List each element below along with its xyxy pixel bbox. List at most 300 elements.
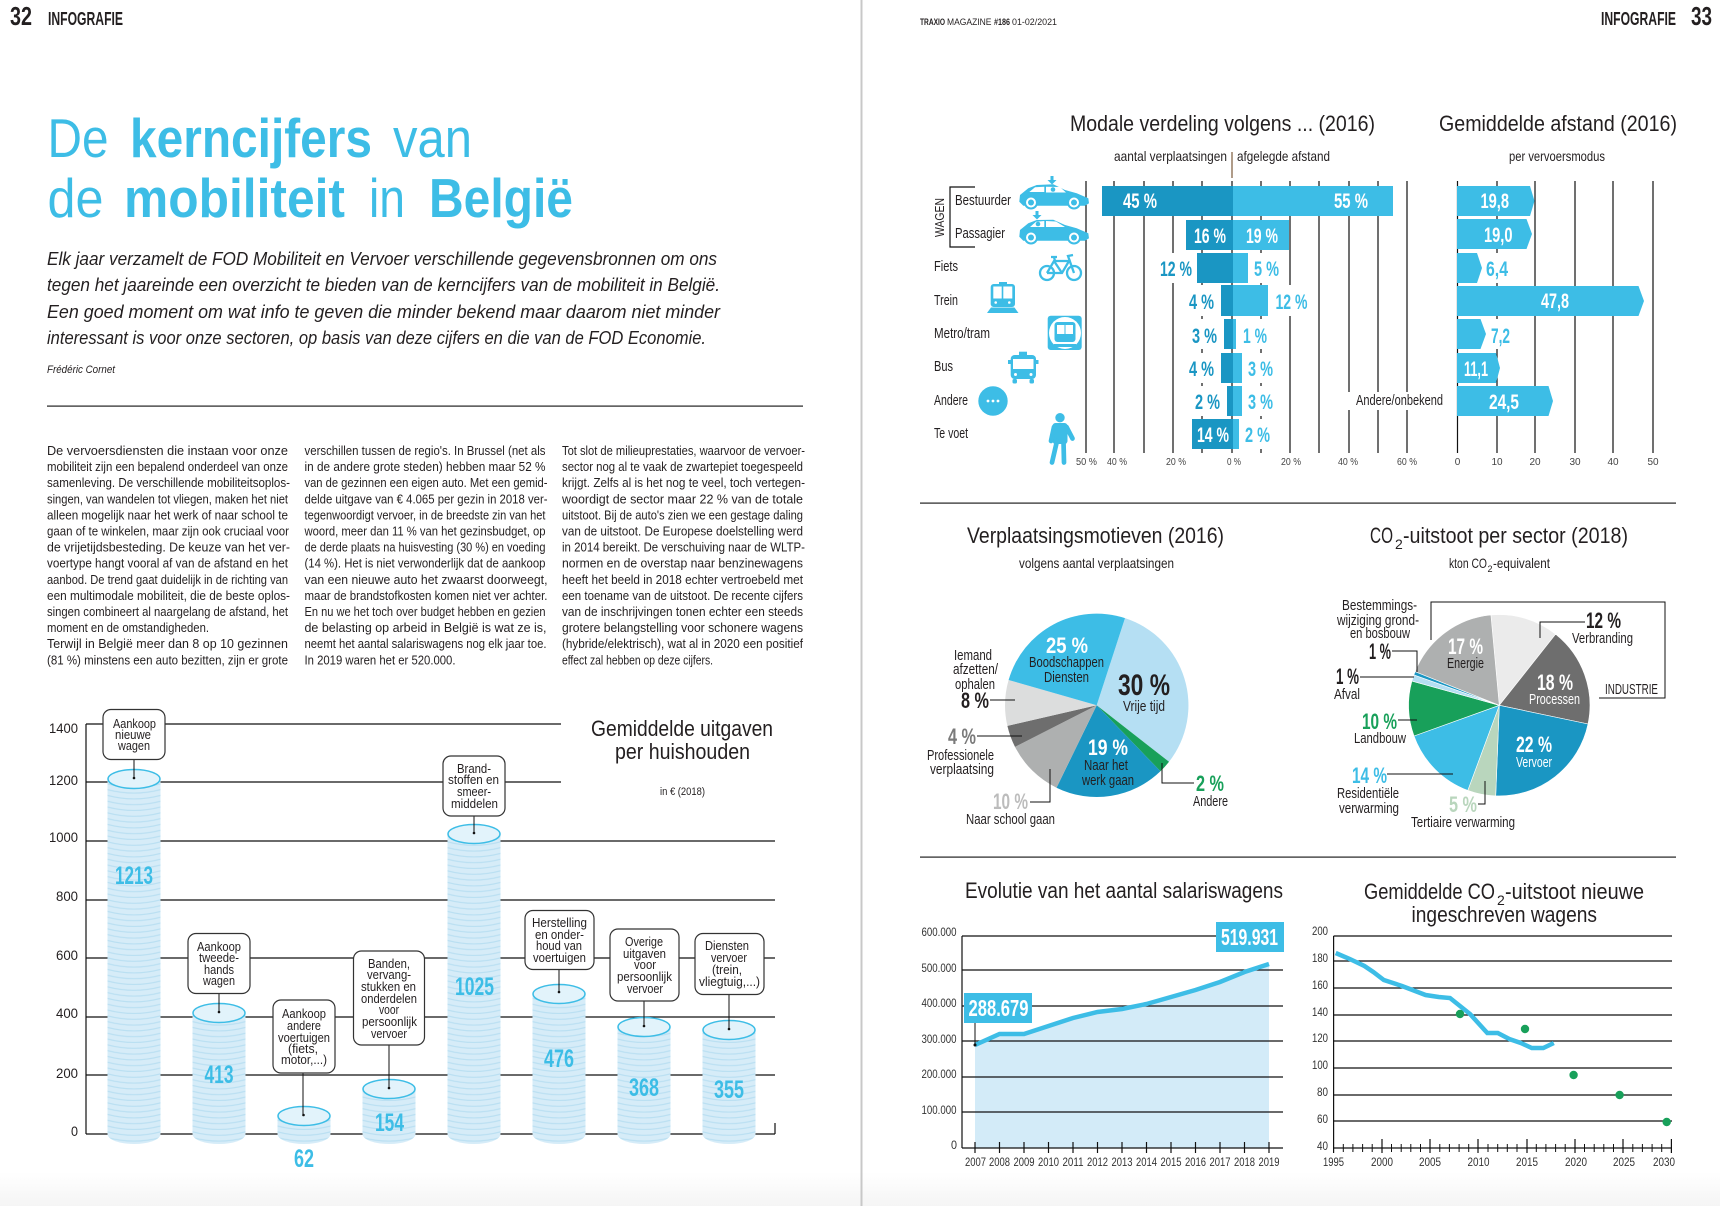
- right page header: 01-02/2021: [1012, 17, 1057, 28]
- slice labels: 4 %: [948, 724, 976, 749]
- mode labels: Fiets: [934, 259, 958, 275]
- callout: herstelling en onderhoud: Herstelling: [532, 916, 587, 930]
- values on stacks: 368: [629, 1074, 659, 1102]
- axis labels: 50: [1647, 457, 1659, 468]
- callout: brandstoffen en smeermiddelen: stoffen en: [448, 773, 499, 787]
- bar percentages: 3 %: [1248, 391, 1273, 414]
- slice labels: 10 %: [1362, 709, 1397, 734]
- callout: banden, vervangstukken: Banden,: [368, 957, 410, 971]
- bar percentages: 1 %: [1243, 325, 1267, 348]
- body text column 2: in de andere grote steden) hebben maar 52 %: [304, 459, 546, 474]
- x labels: 2007: [965, 1155, 986, 1169]
- axis labels: [1076, 457, 1417, 468]
- body text column 2: woord, meer dan 11 % van het gezinsbudget, op: [304, 524, 546, 538]
- heading: gemiddelde afstand: Gemiddelde afstand (2016): [1439, 111, 1677, 136]
- callout: diensten vervoer: [695, 934, 764, 1030]
- slice labels: 14 %: [1352, 763, 1387, 788]
- right page header: [920, 1, 1712, 31]
- bar percentages: 12 %: [1160, 258, 1192, 281]
- x labels: 2018: [1234, 1155, 1255, 1169]
- left page header: [10, 1, 123, 31]
- heading: 2: [1497, 892, 1505, 908]
- x labels: [965, 1155, 1280, 1169]
- heading: -uitstoot nieuwe: [1505, 879, 1644, 904]
- callout: overige uitgaven: voor: [634, 958, 656, 972]
- bar percentages: 3 %: [1248, 358, 1273, 381]
- body text column 1: (81 %) minstens een auto bezitten, zijn er grote: [47, 652, 288, 667]
- body text column 2: de derde plaats na huisvesting (30 %) en voeding: [304, 540, 546, 555]
- y labels: 200: [1312, 924, 1328, 938]
- coin stack: banden: [362, 1080, 416, 1144]
- values on stacks: 476: [544, 1045, 574, 1073]
- distance values: 19,0: [1484, 224, 1512, 247]
- body text column 3: sector nog al te vaak de zwartepiet toegespeeld: [562, 459, 803, 474]
- industry bracket: [1431, 602, 1665, 698]
- callout: 2007 value: [964, 993, 1032, 1046]
- subheading: per vervoersmodus: [1509, 148, 1605, 164]
- values on stacks: [115, 862, 744, 1173]
- y axis and grid lines: [86, 724, 775, 1134]
- left page header: 32: [10, 1, 32, 31]
- callout: banden, vervangstukken: stukken en: [361, 980, 416, 994]
- slice labels: ophalen: [955, 677, 995, 693]
- heading: -uitstoot per sector (2018): [1403, 523, 1628, 548]
- x labels: 2019: [1258, 1155, 1280, 1169]
- y labels: 140: [1312, 1005, 1328, 1019]
- grid and axes: [1334, 936, 1672, 1153]
- title: mobiliteit: [124, 167, 345, 229]
- y labels: 80: [1317, 1085, 1328, 1099]
- coin stack: aankoop nieuwe wagen: [108, 770, 160, 1144]
- callout: 2019 value: 519.931: [1221, 924, 1278, 950]
- wagen bracket: [933, 187, 975, 247]
- slice labels: Vervoer: [1516, 755, 1552, 771]
- pie slices: [1005, 614, 1188, 797]
- heading: CO: [1370, 523, 1393, 548]
- callout: overige uitgaven: uitgaven: [623, 947, 666, 961]
- x labels: 2012: [1087, 1155, 1108, 1169]
- body text column 3: van de inschrijvingen tonen echter een steeds: [562, 604, 803, 619]
- callout: overige uitgaven: [610, 929, 679, 1027]
- y labels: 100.000: [922, 1103, 957, 1117]
- bar percentages: 4 %: [1189, 358, 1214, 381]
- body text column 1: voertype hangt vooral af van de afstand en het: [47, 556, 288, 571]
- callout: aankoop tweedehands wagen: Aankoop: [197, 940, 241, 954]
- bar percentages: 16 %: [1194, 225, 1226, 248]
- body text column 3: Tot slot de milieuprestaties, waarvoor de vervoer-: [562, 443, 805, 458]
- callout: aankoop tweedehands wagen: wagen: [202, 974, 235, 988]
- y labels: [1312, 924, 1328, 1153]
- body text column 3: van de uitstoot. De Europese doelstelling werd: [562, 524, 803, 538]
- callout: aankoop andere voertuigen: andere: [287, 1019, 321, 1033]
- axis labels: 30: [1569, 457, 1581, 468]
- callout: banden, vervangstukken: onderdelen: [361, 992, 417, 1006]
- icon: metro: [1048, 316, 1082, 350]
- y labels: 120: [1312, 1031, 1328, 1045]
- pie slices: [1409, 615, 1590, 796]
- chart heading: Gemiddelde uitgaven: [591, 716, 773, 741]
- intro text: interessant is voor onze sectoren, op basis van deze cijfers en die van de FOD Economie.: [47, 328, 706, 348]
- slice labels: 17 %: [1448, 634, 1483, 659]
- axis labels: 20: [1529, 457, 1541, 468]
- body text column 3: woordigt de sector maar 22 % van de totale: [561, 491, 803, 506]
- mode labels: Te voet: [934, 426, 968, 442]
- slice labels: Landbouw: [1354, 731, 1406, 747]
- slice labels: verplaatsing: [930, 762, 994, 778]
- axis labels: 60 %: [1397, 457, 1417, 468]
- callout: 2007 value: 288.679: [968, 995, 1028, 1021]
- coin stack: overige uitgaven: [618, 1018, 670, 1144]
- CO2 trend line: [1336, 953, 1554, 1048]
- x labels: 2014: [1136, 1155, 1157, 1169]
- y axis labels: 0: [71, 1123, 78, 1139]
- y labels: 100: [1312, 1058, 1328, 1072]
- title: [48, 107, 573, 229]
- chart: evolutie salariswagens: [922, 878, 1284, 1169]
- axis labels: 20 %: [1281, 457, 1301, 468]
- coin stack: tweedehands wagen: [192, 1004, 246, 1144]
- callout: aankoop andere voertuigen: [273, 1000, 335, 1116]
- chart: gemiddelde afstand: [1345, 111, 1677, 468]
- y labels: 40: [1317, 1139, 1328, 1153]
- grid: [1086, 181, 1407, 453]
- x labels: 2009: [1014, 1155, 1035, 1169]
- body text column 3: (hybride/elektrisch), wat al in 2020 een positief: [562, 636, 803, 651]
- heading: [1364, 879, 1644, 927]
- bar percentages: 19 %: [1246, 225, 1278, 248]
- trend line: [975, 964, 1269, 1045]
- y labels: 0: [951, 1138, 957, 1152]
- callout: banden, vervangstukken: persoonlijk: [362, 1015, 418, 1029]
- subheading: kton CO: [1449, 555, 1487, 571]
- slice labels: Bestemmings-: [1342, 598, 1417, 614]
- slice labels: Tertiaire verwarming: [1411, 815, 1515, 831]
- callout: aankoop andere voertuigen: motor,...): [281, 1053, 327, 1067]
- slice labels: 8 %: [961, 688, 989, 713]
- body text column 3: grotere belangstelling voor schonere wagens: [562, 620, 803, 635]
- callout: overige uitgaven: vervoer: [627, 982, 663, 996]
- callout: brandstoffen en smeermiddelen: middelen: [451, 797, 498, 811]
- bar percentages: 2 %: [1245, 424, 1270, 447]
- bar percentages: 3 %: [1192, 325, 1217, 348]
- y axis labels: 1000: [49, 829, 78, 845]
- axis labels: 40: [1607, 457, 1619, 468]
- callout: diensten vervoer: vliegtuig,...): [699, 975, 760, 989]
- subheadings: afgelegde afstand: [1237, 148, 1330, 164]
- body text column 2: van een nieuwe auto het zwaarst doorweegt,: [304, 572, 548, 587]
- mode labels: Trein: [934, 293, 958, 309]
- callout: herstelling en onderhoud: houd van: [536, 939, 582, 953]
- callout: herstelling en onderhoud: voertuigen: [533, 951, 586, 965]
- slice labels: wijziging grond-: [1336, 613, 1419, 629]
- subheading: -equivalent: [1493, 555, 1550, 571]
- x labels: 2010: [1468, 1155, 1490, 1169]
- slice labels: Energie: [1447, 656, 1484, 672]
- bar percentages: 55 %: [1334, 190, 1368, 213]
- arrow bars: [1457, 186, 1644, 416]
- y labels: 400.000: [922, 996, 957, 1010]
- heading: Evolutie van het aantal salariswagens: [965, 878, 1283, 903]
- axis labels: 0: [1455, 457, 1461, 468]
- axis labels: 50 %: [1076, 457, 1097, 468]
- body text column 2: van de gezinnen een eigen auto. Met een gemid-: [304, 475, 548, 490]
- y labels: 60: [1317, 1112, 1328, 1126]
- slice labels: [1334, 598, 1658, 831]
- x labels: 2008: [989, 1155, 1010, 1169]
- x labels: 2005: [1419, 1155, 1441, 1169]
- callout: brandstoffen en smeermiddelen: Brand-: [457, 762, 491, 776]
- slice labels: Boodschappen: [1029, 655, 1104, 671]
- axis labels: [1455, 457, 1659, 468]
- body text column 2: de belasting op arbeid in België is wat ze is,: [304, 620, 546, 635]
- leader lines: [977, 700, 1194, 802]
- callout: banden, vervangstukken: vervoer: [371, 1027, 407, 1041]
- y labels: 500.000: [922, 961, 957, 975]
- bar percentages: 4 %: [1189, 291, 1214, 314]
- values on stacks: 154: [375, 1109, 404, 1137]
- title: de: [48, 167, 104, 229]
- slice labels: Professionele: [927, 748, 994, 764]
- slice labels: Processen: [1529, 692, 1580, 708]
- label backings: [1484, 253, 1512, 349]
- x labels: 2011: [1062, 1155, 1084, 1169]
- coin stack: brandstoffen: [448, 824, 500, 1144]
- bar percentages: 14 %: [1197, 424, 1229, 447]
- slice labels: 19 %: [1088, 735, 1128, 760]
- callout: aankoop andere voertuigen: Aankoop: [282, 1007, 326, 1021]
- body text column 2: (14 %). Het is niet verwonderlijk dat de aankoop: [304, 556, 546, 571]
- heading: Verplaatsingsmotieven (2016): [967, 523, 1224, 548]
- slice labels: verwarming: [1339, 801, 1399, 817]
- body text column 2: tegenwoordigt vervoer, in de breedste zin van het: [304, 507, 546, 522]
- other label: [1345, 392, 1447, 410]
- distance values: 24,5: [1489, 391, 1519, 414]
- body text column 2: [304, 443, 548, 667]
- slice labels: 5 %: [1449, 792, 1477, 817]
- x labels: 2025: [1613, 1155, 1635, 1169]
- x labels: [1323, 1155, 1675, 1169]
- callout: banden, vervangstukken: voor: [379, 1003, 399, 1017]
- body text column 1: alleen mogelijk naar het werk of naar school te: [47, 507, 288, 522]
- subheadings: [1114, 148, 1330, 178]
- callout: aankoop nieuwe wagen: [103, 710, 165, 779]
- x labels: 2010: [1038, 1155, 1059, 1169]
- y labels: [922, 925, 957, 1152]
- callout: aankoop tweedehands wagen: tweede-: [199, 951, 239, 965]
- y labels: 160: [1312, 978, 1328, 992]
- author credit: Frédéric Cornet: [47, 364, 116, 376]
- callout: aankoop nieuwe wagen: nieuwe: [115, 728, 151, 742]
- y axis labels: [49, 720, 78, 1139]
- distance values: 7,2: [1491, 325, 1510, 348]
- icon: car passenger: [1019, 211, 1089, 244]
- slice labels: 18 %: [1537, 670, 1573, 695]
- chart heading: [591, 716, 773, 798]
- axis labels: 20 %: [1166, 457, 1186, 468]
- body text column 1: singen combineert al naargelang de afstand, het: [47, 604, 288, 619]
- heading: modale verdeling: Modale verdeling volgens ... (2016): [1070, 111, 1375, 136]
- bar percentages: 45 %: [1123, 190, 1157, 213]
- axis labels: 0 %: [1227, 457, 1241, 468]
- body text column 1: moment en de omstandigheden.: [47, 620, 209, 635]
- distance values: 11,1: [1464, 358, 1488, 381]
- slice labels: 1 %: [1336, 664, 1359, 689]
- bar percentages: 2 %: [1195, 391, 1220, 414]
- x labels: 2013: [1112, 1155, 1133, 1169]
- callout: brandstoffen en smeermiddelen: smeer-: [457, 785, 491, 799]
- x labels: 2017: [1210, 1155, 1231, 1169]
- minor ticks: [1343, 1144, 1662, 1152]
- distance values: [1464, 190, 1569, 414]
- slice labels: INDUSTRIE: [1605, 682, 1658, 698]
- slice labels: 1 %: [1369, 639, 1391, 664]
- body text column 3: [561, 443, 805, 667]
- callout: aankoop andere voertuigen: voertuigen: [278, 1031, 330, 1045]
- mode labels: [934, 193, 1011, 442]
- body text column 1: Terwijl in België meer dan 8 op 10 gezinnen: [47, 636, 288, 651]
- chart: CO2-uitstoot per sector pie: [1334, 523, 1665, 831]
- bars: [1102, 186, 1393, 449]
- chart: modale verdeling: [933, 111, 1417, 468]
- slice labels: 12 %: [1586, 608, 1621, 633]
- values on stacks: 1213: [115, 862, 153, 890]
- coin stack: diensten vervoer: [702, 1020, 756, 1144]
- chart: verplaatsingsmotieven pie: [927, 523, 1228, 828]
- title: van: [393, 107, 472, 169]
- body text column 1: samenleving. De verschillende mobiliteitsoplos-: [47, 475, 290, 490]
- coin stack: herstelling: [532, 984, 586, 1144]
- wagen bracket: WAGEN: [933, 198, 947, 237]
- y axis labels: 800: [56, 888, 78, 904]
- bar percentages: 5 %: [1254, 258, 1279, 281]
- callout: diensten vervoer: Diensten: [705, 939, 749, 953]
- intro text: Een goed moment om wat info te geven die minder bekend maar daarom niet minder: [47, 302, 721, 322]
- slice labels: 25 %: [1046, 633, 1088, 658]
- axis labels: 40 %: [1107, 457, 1127, 468]
- distance values: 6,4: [1486, 258, 1508, 281]
- slice labels: Iemand: [954, 648, 992, 664]
- callout: diensten vervoer: vervoer: [711, 951, 747, 965]
- body text column 1: mobiliteit zijn een bepalend onderdeel van onze: [47, 459, 288, 474]
- right page header: MAGAZINE: [947, 17, 992, 28]
- right page header: #186: [994, 17, 1010, 28]
- slice labels: Verbranding: [1572, 631, 1633, 647]
- body text column 2: En nu we het toch over budget hebben en gezien: [304, 604, 546, 619]
- body text column 2: maar de brandstofkosten komen niet ver achter.: [304, 588, 548, 603]
- body text column 1: aanbod. De trend gaat duidelijk in de richting van: [47, 572, 288, 587]
- slice labels: Afval: [1334, 687, 1360, 703]
- y axis labels: 600: [56, 947, 78, 963]
- intro text: tegen het jaareinde een overzicht te bieden van de kerncijfers van de mobiliteit in België.: [47, 275, 720, 295]
- body text column 3: uitstoot. Bij de auto's zien we een gestage daling: [562, 507, 803, 522]
- slice labels: werk gaan: [1081, 773, 1134, 789]
- body text column 1: de vrijetijdsbesteding. De keuze van het ver-: [47, 540, 290, 555]
- title: kerncijfers: [130, 107, 372, 169]
- callout: overige uitgaven: persoonlijk: [617, 970, 673, 984]
- icon: other: [978, 386, 1008, 416]
- area under line: [975, 964, 1269, 1148]
- slice labels: Residentiële: [1337, 786, 1399, 802]
- coin stack: andere voertuigen: [278, 1106, 330, 1144]
- body text column 3: normen en de overstap naar benzinewagens: [562, 556, 803, 571]
- slice labels: Andere: [1193, 794, 1228, 810]
- callout: herstelling en onderhoud: [525, 910, 594, 993]
- other label: Andere/onbekend: [1356, 393, 1443, 409]
- callout: overige uitgaven: Overige: [625, 935, 663, 949]
- body text column 1: [47, 443, 290, 667]
- slice labels: 10 %: [993, 789, 1028, 814]
- left page header: INFOGRAFIE: [48, 9, 123, 29]
- title: De: [48, 107, 108, 169]
- right page header: TRAXIO: [920, 17, 945, 28]
- bar percentages: 12 %: [1276, 291, 1308, 314]
- subheading: volgens aantal verplaatsingen: [1019, 555, 1174, 571]
- callout: aankoop tweedehands wagen: hands: [204, 963, 234, 977]
- callout: banden, vervangstukken: vervang-: [367, 968, 411, 982]
- x labels: 1995: [1323, 1155, 1344, 1169]
- x labels: 2030: [1653, 1155, 1675, 1169]
- right page header: 33: [1691, 1, 1712, 31]
- title: België: [429, 167, 573, 229]
- subheadings: aantal verplaatsingen: [1114, 148, 1227, 164]
- heading: ingeschreven wagens: [1412, 902, 1597, 927]
- body text column 3: een toename van de uitstoot. De recente cijfers: [562, 588, 803, 603]
- x labels: 2020: [1565, 1155, 1587, 1169]
- icon: car driver: [1019, 176, 1089, 210]
- callout: brandstoffen en smeermiddelen: [443, 756, 505, 834]
- values on stacks: 1025: [455, 973, 494, 1001]
- slice labels: 30 %: [1118, 669, 1170, 702]
- callout: banden, vervangstukken: [354, 951, 424, 1089]
- grid and axes: [962, 936, 1283, 1153]
- callout: aankoop nieuwe wagen: wagen: [117, 739, 150, 753]
- mode labels: Metro/tram: [934, 326, 990, 342]
- mode labels: Passagier: [955, 226, 1005, 242]
- x labels: 2016: [1185, 1155, 1206, 1169]
- leader lines: [1360, 622, 1585, 804]
- callout: diensten vervoer: (trein,: [712, 963, 742, 977]
- body text column 1: een multimodale mobiliteit, die de beste oplos-: [47, 588, 290, 603]
- y axis labels: 1200: [49, 772, 78, 788]
- x labels: 2015: [1160, 1155, 1182, 1169]
- mode labels: Bestuurder: [955, 193, 1011, 209]
- y labels: 200.000: [922, 1067, 957, 1081]
- slice labels: 22 %: [1516, 732, 1552, 757]
- icon: bicycle: [1040, 255, 1081, 280]
- slice labels: Diensten: [1044, 670, 1089, 686]
- icon: bus: [1008, 352, 1038, 384]
- body text column 1: gaan of te winkelen, maar zijn ook cruciaal voor: [47, 524, 290, 538]
- y labels: 180: [1312, 951, 1328, 965]
- slice labels: Naar school gaan: [966, 812, 1055, 828]
- body text column 1: De vervoersdiensten die instaan voor onze: [47, 443, 288, 458]
- slice labels: Naar het: [1084, 758, 1128, 774]
- axis labels: 40 %: [1338, 457, 1358, 468]
- intro text: [47, 249, 721, 348]
- y labels: 600.000: [922, 925, 957, 939]
- chart: gemiddelde CO2-uitstoot nieuwe wagens: [1312, 879, 1675, 1169]
- body text column 3: heeft het beeld in 2018 echter vertroebeld met: [562, 572, 803, 587]
- y axis labels: 1400: [49, 720, 78, 736]
- slice labels: Vrije tijd: [1123, 699, 1165, 715]
- label backings: [1158, 253, 1310, 449]
- icon: pedestrian: [1051, 413, 1072, 462]
- chart heading: per huishouden: [615, 739, 750, 764]
- slice labels: afzetten/: [953, 662, 999, 678]
- body text column 3: effect zal hebben op deze cijfers.: [562, 652, 713, 667]
- distance values: 47,8: [1541, 290, 1569, 313]
- slice labels: en bosbouw: [1350, 626, 1410, 642]
